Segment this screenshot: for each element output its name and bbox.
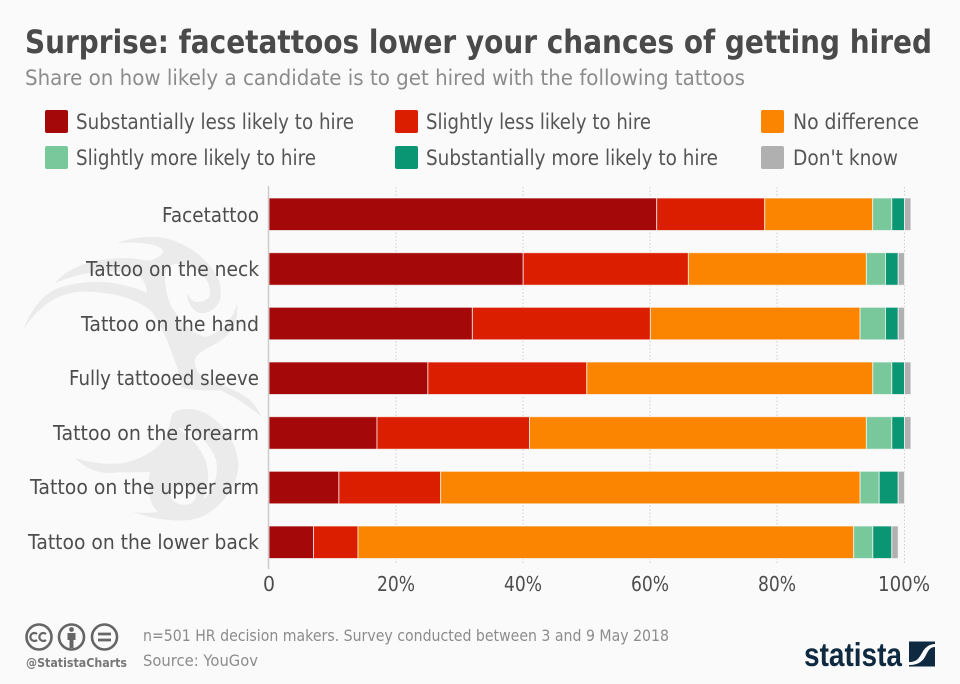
survey note: n=501 HR decision makers. Survey conducted between 3 and 9 May 2018 bbox=[143, 626, 669, 645]
axis labels bbox=[263, 572, 930, 596]
bar: Fully tattooed sleeve bbox=[269, 362, 911, 394]
axis labels: 20% bbox=[377, 572, 415, 596]
category labels: Facetattoo bbox=[162, 203, 259, 227]
category labels: Tattoo on the hand bbox=[80, 312, 259, 336]
category labels: Fully tattooed sleeve bbox=[69, 366, 259, 390]
legend item: substantially more likely: Substantially more likely to hire bbox=[426, 146, 718, 170]
legend bbox=[45, 110, 919, 170]
legend item: slightly less likely: Slightly less likely to hire bbox=[426, 110, 651, 134]
legend item: don't know bbox=[761, 146, 898, 170]
axis labels: 80% bbox=[758, 572, 796, 596]
legend item: no difference: No difference bbox=[793, 110, 919, 134]
statista logo: statista bbox=[804, 636, 903, 673]
category labels bbox=[27, 203, 259, 554]
category labels: Tattoo on the neck bbox=[85, 257, 259, 281]
bar: Tattoo on the hand bbox=[269, 307, 904, 340]
category labels: Tattoo on the lower back bbox=[27, 530, 259, 554]
icon: creative commons licence bbox=[26, 624, 117, 650]
category labels: Tattoo on the forearm bbox=[52, 421, 259, 445]
axis labels: 40% bbox=[504, 572, 542, 596]
legend item: slightly more likely: Slightly more likely to hire bbox=[76, 146, 316, 170]
handle: @StatistaCharts bbox=[26, 656, 127, 670]
category labels: Tattoo on the upper arm bbox=[29, 475, 259, 499]
bar: Tattoo on the neck bbox=[269, 253, 904, 285]
axis labels: 60% bbox=[631, 572, 669, 596]
source: Source: YouGov bbox=[143, 651, 258, 670]
stacked bar chart bbox=[27, 186, 930, 596]
bar: Tattoo on the upper arm bbox=[269, 471, 904, 504]
bar: Facetattoo bbox=[269, 198, 911, 230]
legend item: don't know: Don't know bbox=[793, 146, 898, 170]
legend item: substantially less likely: Substantially less likely to hire bbox=[76, 110, 354, 134]
icon: tribal tattoo background bbox=[23, 237, 262, 521]
bar: Tattoo on the lower back bbox=[269, 526, 898, 558]
icon: statista square bbox=[909, 642, 935, 666]
bar: Tattoo on the forearm bbox=[269, 417, 911, 449]
axis labels: 100% bbox=[878, 572, 930, 596]
axis labels: 0 bbox=[263, 572, 275, 596]
subtitle: Share on how likely a candidate is to get hired with the following tattoos bbox=[25, 66, 745, 90]
